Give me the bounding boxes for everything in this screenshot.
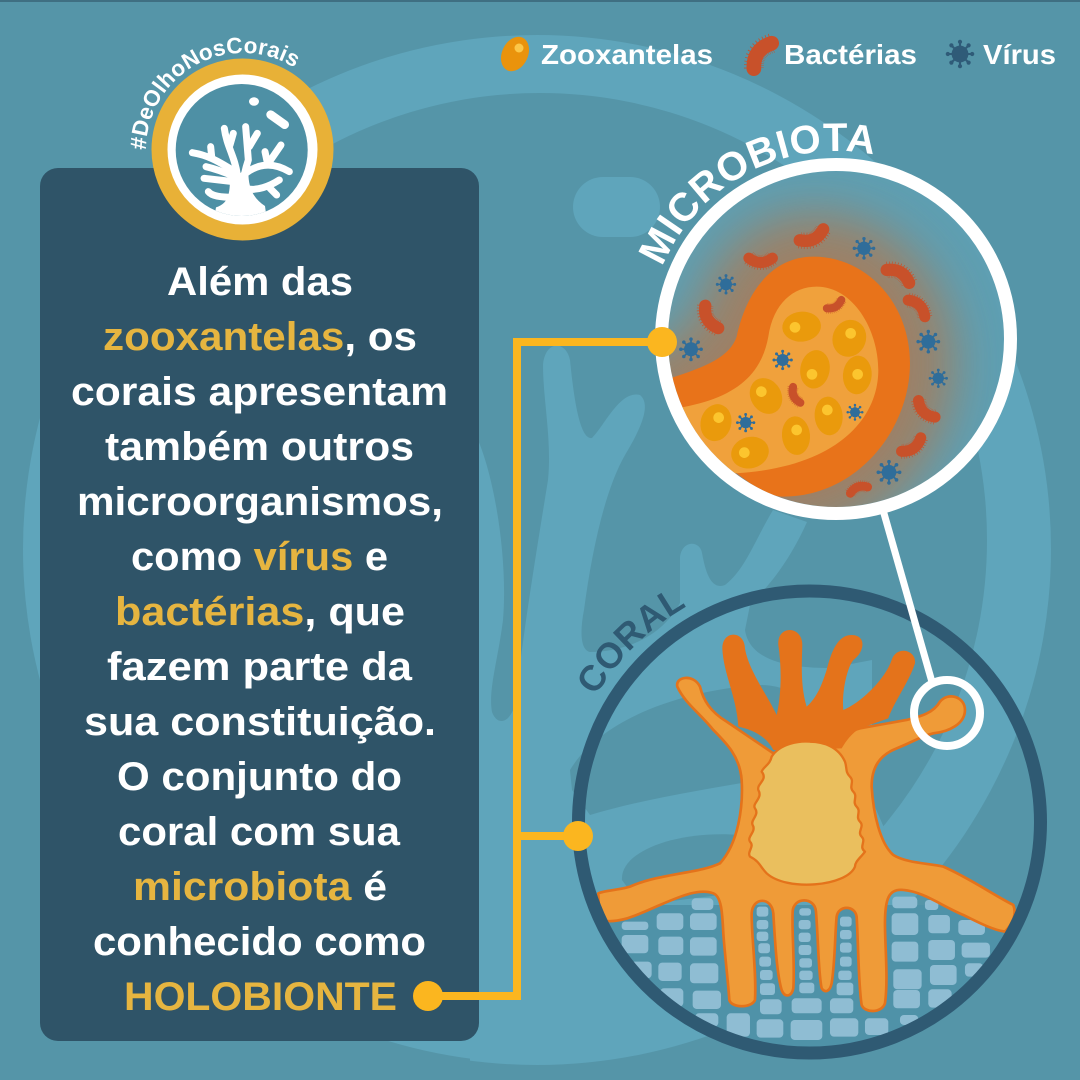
brown halo xyxy=(660,257,910,497)
text block: main paragraph: corais apresentam xyxy=(71,370,448,414)
coral label: CORAL xyxy=(580,593,686,690)
legend label: Vírus: Vírus xyxy=(983,39,1056,70)
icon: zooxantela xyxy=(496,32,534,76)
badge inner circle xyxy=(176,84,308,216)
text block: main paragraph: sua constituição. xyxy=(84,700,436,744)
badge: #DeOlhoNosCorais xyxy=(130,38,334,240)
text block: main paragraph: zooxantelas , os xyxy=(103,315,417,359)
badge ring xyxy=(160,66,326,232)
skeleton cells xyxy=(622,897,990,1040)
text block: main paragraph: microorganismos, xyxy=(77,480,443,524)
text block: main paragraph: como vírus e xyxy=(131,535,388,579)
icon: virus xyxy=(946,40,974,68)
microbiota inside xyxy=(660,169,1006,509)
legend label: Bactérias: Bactérias xyxy=(784,39,917,70)
coral cells backdrop xyxy=(609,905,904,1030)
legend label: Zooxantelas: Zooxantelas xyxy=(541,39,713,70)
curved hashtag title: #DeOlhoNosCorais xyxy=(130,38,298,150)
text block: main paragraph: microbiota é xyxy=(133,865,387,909)
text block: main paragraph: O conjunto do xyxy=(117,755,402,799)
panel: coral circle xyxy=(572,584,1047,1060)
arrow: zoom line from coral to microbiota xyxy=(883,510,980,746)
text block: main paragraph xyxy=(71,260,448,1019)
tissue outer layer xyxy=(670,257,910,497)
bacteria xyxy=(701,229,935,493)
viruses xyxy=(679,237,948,485)
text block: main paragraph: fazem parte da xyxy=(107,645,413,689)
tissue inner layer xyxy=(670,287,878,473)
connector: yellow lines and dots xyxy=(413,327,677,1011)
zooxantela nuclei xyxy=(713,322,863,458)
text block: main paragraph: coral com sua xyxy=(118,810,401,854)
coral circle outline xyxy=(578,591,1040,1053)
panel: microbiota circle xyxy=(638,123,1017,520)
text block: main paragraph: bactérias , que xyxy=(115,590,405,634)
text block: main paragraph: HOLOBIONTE xyxy=(124,975,397,1019)
microbiota label: MICROBIOTA xyxy=(638,123,873,264)
icon: coral logo xyxy=(192,97,289,223)
legend xyxy=(496,32,1056,76)
coral body xyxy=(598,678,1015,1011)
text block: main paragraph: Além das xyxy=(167,260,353,304)
coral tissue and cells xyxy=(598,630,1015,1040)
coral tentacles xyxy=(722,630,915,750)
panel: main text xyxy=(40,168,479,1041)
microbiota circle outline xyxy=(662,164,1010,514)
text block: main paragraph: também outros xyxy=(105,425,414,469)
coral stomach xyxy=(749,741,865,885)
text block: main paragraph: conhecido como xyxy=(93,920,426,964)
icon: bacteria xyxy=(749,40,772,69)
zooxantelas xyxy=(696,310,873,473)
